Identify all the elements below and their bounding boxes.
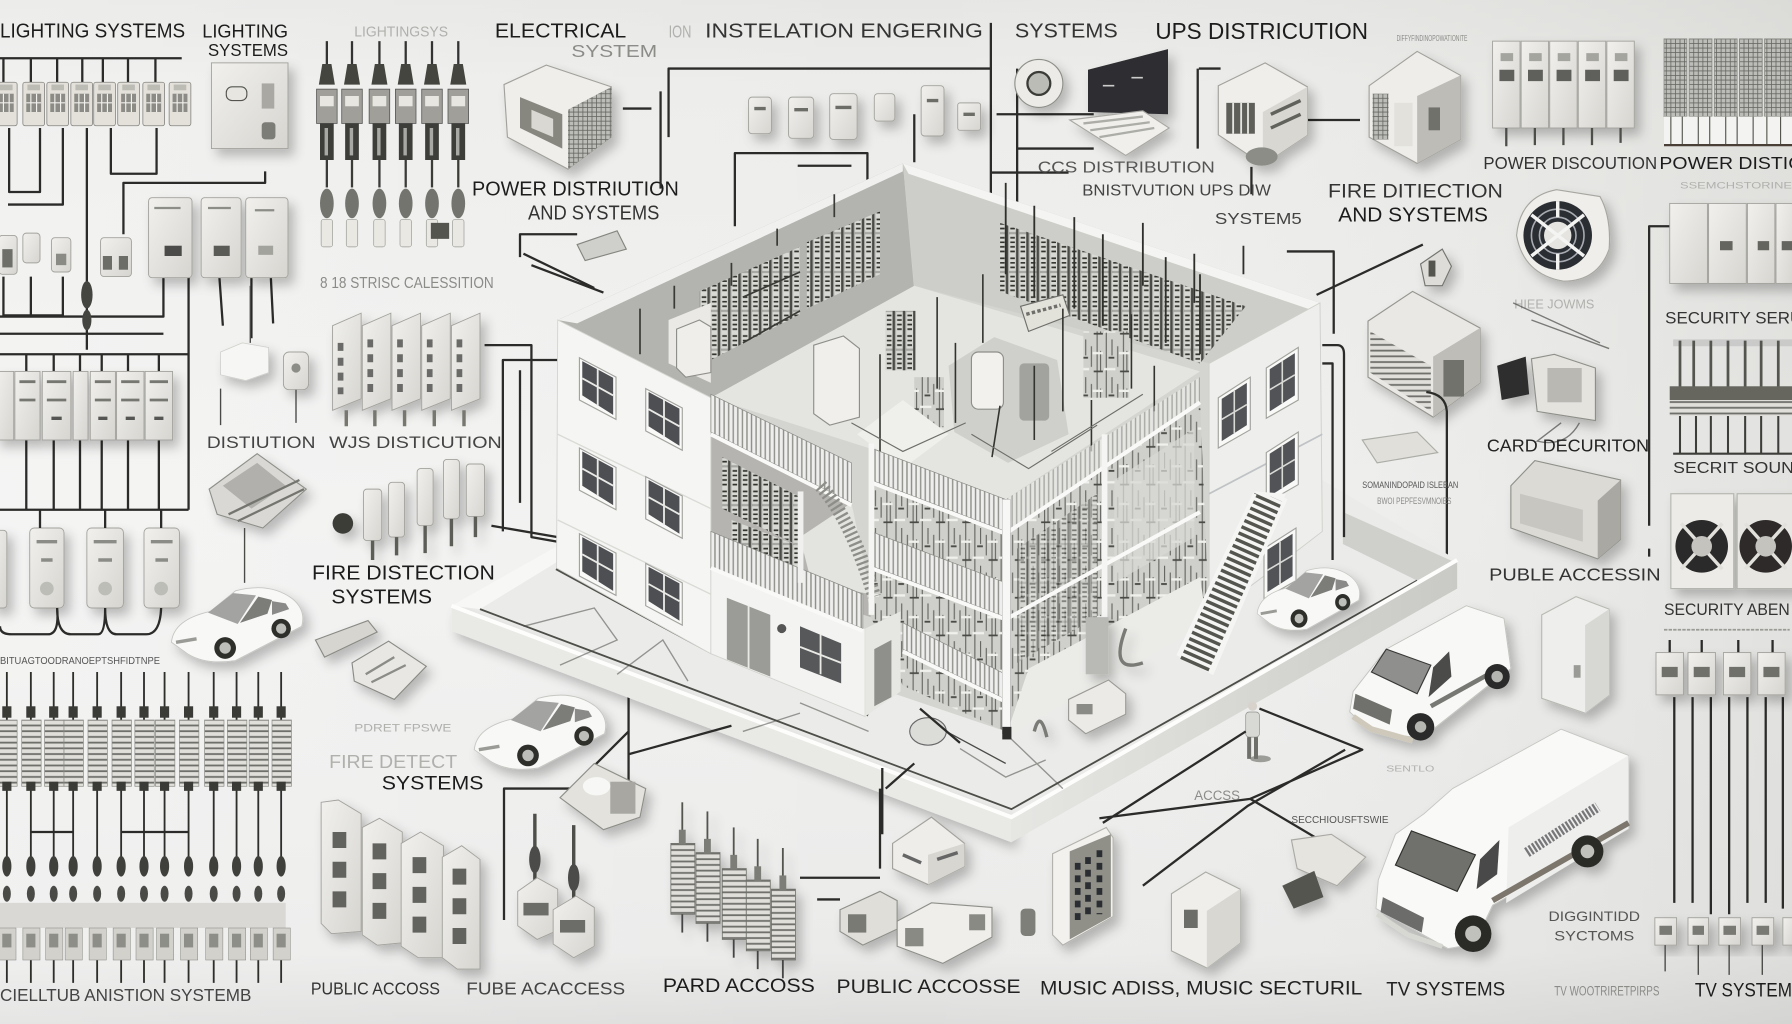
parts row top centre: [749, 86, 981, 139]
panel: power discoution top right: [1483, 41, 1657, 173]
wall units: lower switches: [0, 528, 179, 608]
card box: [1511, 461, 1621, 559]
white strips: [1664, 117, 1792, 145]
label: fire distection systems: [312, 561, 495, 608]
back right wall: [903, 163, 1320, 363]
faint tv label: TV WOOTRIRETPIRPS: [1554, 983, 1659, 998]
small sockets: [221, 343, 309, 390]
wire: to car roof: [244, 528, 246, 583]
cross wires: [31, 831, 189, 833]
wire: [504, 697, 629, 920]
digital label: [1549, 909, 1640, 945]
small boxes: [840, 891, 992, 963]
railings: [711, 377, 1200, 702]
panel: control box right of building: [1362, 291, 1661, 585]
module row: [333, 313, 480, 410]
bottom row labels: TV SYSTEMS: [1386, 978, 1505, 1000]
machine: [560, 763, 646, 830]
panel: antenna boxes: [504, 697, 646, 958]
panel: camera box top centre: [472, 20, 679, 293]
labels: [207, 433, 502, 452]
fans lower right: [1671, 494, 1792, 589]
labels: WJS DISTICUTION: [329, 433, 502, 452]
panel: power distribution vents: [1659, 39, 1792, 191]
bottom row labels: [311, 975, 1505, 1000]
hanging keys: [671, 802, 795, 978]
tiny text: BWOI PEPFESVMNOIES: [1377, 496, 1451, 506]
small devices: [315, 621, 426, 699]
control box: [211, 63, 288, 149]
boxes: [518, 846, 594, 958]
wires: right of building: [1322, 345, 1344, 560]
camera cube: [504, 65, 611, 169]
panel: fire key fobs: [312, 459, 495, 608]
panel: printer device: [209, 454, 306, 528]
small meter: [431, 223, 449, 239]
top row heading text: [669, 18, 1467, 44]
isometric building: [451, 163, 1457, 842]
bottom boxes: [1655, 918, 1792, 945]
wiring: lighting bus and feeders: [0, 58, 273, 510]
bottom row labels: FUBE ACACCESS: [466, 978, 625, 998]
camera fitting: [577, 231, 626, 261]
left wall: [557, 320, 711, 654]
digital label: DIGGINTIDD: [1549, 909, 1640, 925]
fuse row: top lighting breakers: [0, 82, 191, 126]
diagonal wire: [1287, 245, 1423, 334]
car: white sedan lower: [474, 695, 606, 769]
faint: SSEMCHSTORINE: [1680, 181, 1792, 191]
tall cabinet: [1542, 597, 1609, 713]
label: POWER DISCOUTION: [1483, 153, 1657, 173]
right wall: [1209, 303, 1322, 617]
person: [1246, 702, 1271, 762]
panel: lighting systems wiring at top left: [0, 20, 273, 634]
panel row: distribution boards: [0, 371, 173, 440]
bottom row labels: PARD ACCOSS: [663, 975, 815, 997]
exterior staircase: [1177, 491, 1286, 674]
top row heading text: UPS DISTRICUTION: [1155, 18, 1368, 44]
windows: [579, 358, 682, 625]
vents: [1664, 39, 1792, 117]
tiny text: SOMANINDOPAID ISLEBAN: [1362, 480, 1458, 490]
lamp and wire: [520, 234, 603, 293]
disc device: [1015, 59, 1063, 107]
cube: [893, 817, 965, 885]
labels: mid distribution: SYSTEM5: [1215, 211, 1302, 228]
key cluster: [333, 459, 485, 560]
top row heading text: SYSTEMS: [1015, 20, 1118, 43]
interior machinery: [677, 274, 1154, 469]
heading: lighting systems stacked: LIGHTING: [202, 21, 288, 42]
faint labels: fire detect systems: [329, 722, 483, 795]
heading: electrical: [495, 20, 657, 61]
wires to sockets: [221, 286, 296, 425]
labels: DISTIUTION: [207, 433, 315, 452]
heading: electrical: ELECTRICAL: [495, 20, 626, 43]
panel: tall connector column group: [317, 25, 494, 292]
rack row: [1670, 341, 1792, 454]
top row heading text: ION: [669, 22, 691, 42]
middle facade: [871, 480, 1006, 731]
rack box: [1368, 291, 1480, 417]
tiny text: [1362, 480, 1458, 506]
connectors: [317, 41, 469, 247]
wiring: lower loops: [0, 510, 161, 634]
panel: security boxes bottom right: [1549, 600, 1792, 1002]
coil device: [910, 718, 1006, 763]
tiny label: SECCHIOUSFTSWIE: [1291, 815, 1389, 826]
digital label: SYCTOMS: [1554, 929, 1634, 945]
ground machines: [1034, 617, 1143, 737]
top boxes: [1656, 653, 1785, 695]
labels: mid distribution: CCS DISTRIBUTION: [1038, 160, 1215, 177]
label: CARD DECURITON: [1487, 435, 1649, 455]
labels: mid distribution: [1038, 160, 1302, 228]
faint labels: fire detect systems: SYSTEMS: [382, 773, 483, 795]
label: fire detection and systems: [1328, 181, 1503, 227]
label: fire distection systems: SYSTEMS: [331, 585, 432, 608]
pillars: [798, 434, 1107, 739]
cabinet: [1171, 872, 1240, 968]
wires: modules to building: [485, 345, 558, 542]
spikes: [1665, 945, 1762, 975]
label: fire distection systems: FIRE DISTECTION: [312, 561, 495, 584]
interior floor: [711, 286, 1200, 499]
wire: [1649, 226, 1691, 557]
tiny heading: BITUAGTOODRANOEPTSHFIDTNPE: [0, 656, 160, 667]
faint labels: fire detect systems: FIRE DETECT: [329, 751, 457, 772]
heading: power distribution: POWER DISTRIUTION: [472, 177, 679, 200]
cabinet top right: [1369, 51, 1461, 163]
panel: public access tall units: [321, 800, 480, 969]
ground cables: [629, 709, 1362, 899]
UPS cube: [1218, 63, 1307, 166]
interior base: [558, 163, 1320, 731]
camera unit: [1497, 354, 1595, 421]
faint tiny label: SENTLO: [1386, 764, 1434, 773]
label: PUBLE ACCESSIN: [1489, 565, 1661, 585]
tiny line: [1664, 629, 1790, 631]
legs: [1506, 128, 1621, 146]
faint access label: ACCSS: [1194, 788, 1240, 803]
fan: [1517, 190, 1610, 281]
van: [1350, 606, 1511, 741]
wires from building to top devices: [623, 23, 1360, 274]
truck: [1376, 729, 1629, 952]
antennas: [535, 814, 574, 903]
lower entrance wall: [711, 566, 901, 717]
panel: distribution modules: [207, 286, 502, 452]
remote pod: [1021, 909, 1035, 936]
panel: lighting control box: [202, 21, 288, 149]
breaker row: [1493, 41, 1634, 128]
label: CIELLTUB ANISTION SYSTEMB: [0, 985, 251, 1005]
sketch panel: [1362, 432, 1438, 463]
top row heading text: DIFFYFINDINOPOWATIONITE: [1397, 34, 1467, 43]
bottom row labels: MUSIC ADISS, MUSIC SECTURIL: [1040, 977, 1363, 999]
connector group: mid wiring sensors: [0, 233, 131, 330]
heading: faint lighting: LIGHTINGSYS: [354, 25, 448, 41]
curved interior stair: [821, 486, 874, 597]
heading: lighting systems stacked: SYSTEMS: [208, 40, 288, 60]
keypad tower: [1053, 827, 1113, 945]
faint label: 8 18 STRISC CALESSITION: [320, 275, 494, 292]
module legs: [346, 410, 464, 426]
label: fire detection and systems: AND SYSTEMS: [1338, 204, 1488, 227]
band behind columns: [0, 903, 286, 928]
labels: mid distribution: BNISTVUTION UPS DIW: [1082, 182, 1272, 199]
plinth sketches: [523, 608, 1063, 789]
panel: fuse matrix bottom left: [0, 656, 291, 1005]
faint label: HIEE JOWMS: [1514, 298, 1594, 312]
label: POWER DISTIC: [1659, 153, 1792, 173]
sketch devices: [1282, 834, 1366, 909]
heading: lighting systems stacked: [202, 21, 288, 60]
bottom row labels: PUBLIC ACCOSS: [311, 978, 440, 998]
sketch device: [1513, 303, 1609, 443]
bottom row labels: PUBLIC ACCOSSE: [837, 976, 1021, 998]
label: fire detection and systems: FIRE DITIECTION: [1328, 181, 1503, 203]
label: SECRIT SOUNI: [1673, 460, 1792, 477]
cable: [1426, 392, 1447, 560]
heading: power distribution: [472, 177, 679, 224]
heading: electrical: SYSTEM: [571, 41, 657, 61]
top row heading text: INSTELATION ENGERING: [705, 20, 983, 43]
right facade: [1006, 400, 1209, 737]
panel: security servers right: [1649, 203, 1792, 557]
left facade under stairs: [711, 432, 871, 617]
heading: power distribution: AND SYSTEMS: [528, 201, 659, 224]
panel: three wall distribution boards: [149, 198, 288, 278]
panel: centre bottom parts: [671, 764, 1434, 978]
car: white sedan left: [171, 588, 303, 662]
server cabinets: [1670, 203, 1792, 283]
small bracket: [1421, 249, 1451, 286]
heading: lighting systems: LIGHTING SYSTEMS: [0, 20, 185, 43]
columns: [0, 672, 291, 983]
laptop: [1070, 49, 1169, 155]
back left wall: [558, 163, 914, 398]
faint labels: fire detect systems: PDRET FPSWE: [354, 722, 452, 734]
car by stairs: [1257, 568, 1360, 630]
plinth: [451, 480, 1457, 842]
long wires: [1670, 640, 1783, 914]
